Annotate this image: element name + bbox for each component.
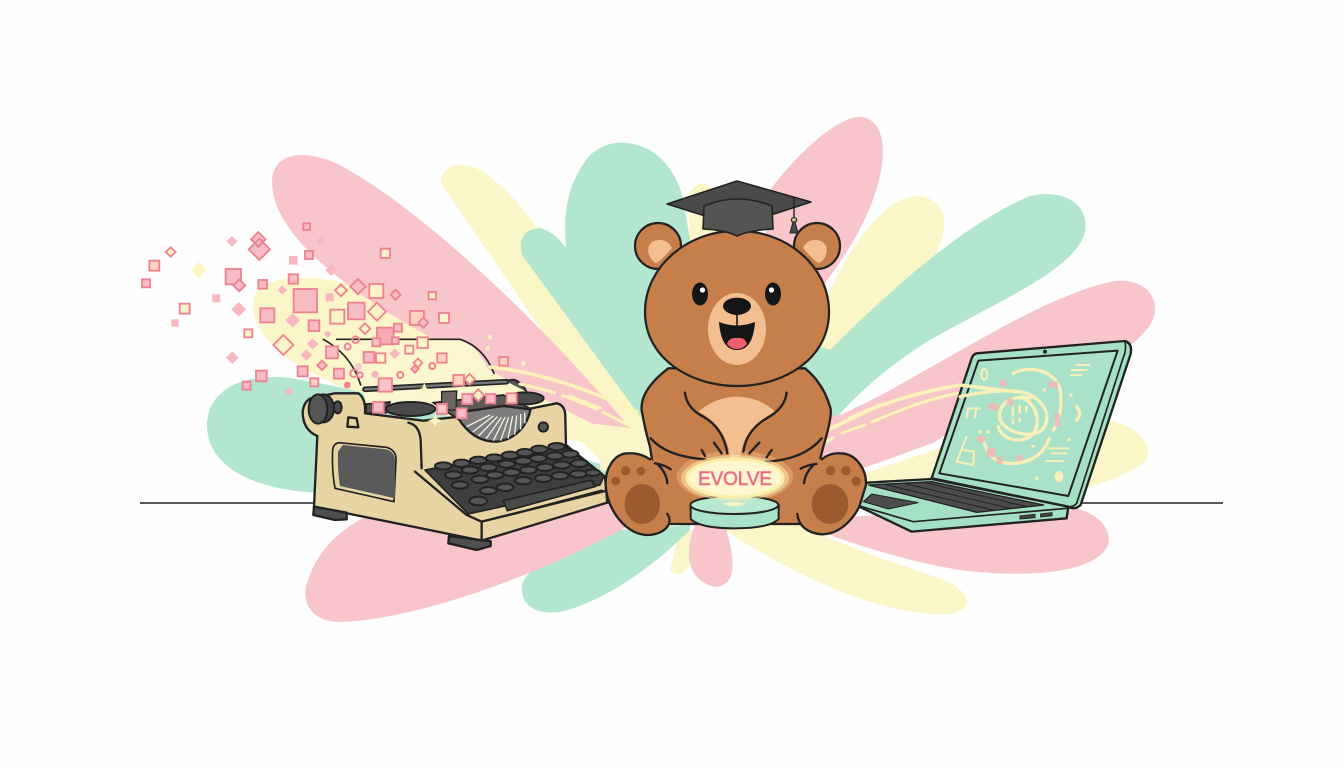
rollers and knob: [506, 392, 544, 404]
carriage bar: [365, 382, 507, 389]
evolve label: EVOLVE: [698, 469, 772, 490]
background petals: [207, 117, 1155, 622]
right foot: [797, 453, 866, 534]
dissolving pixel particles: [142, 223, 526, 427]
bear head: [645, 231, 829, 386]
front edge: [415, 472, 607, 541]
ports: [1020, 513, 1052, 519]
light stream on laptop: [960, 385, 1035, 398]
bear torso: [606, 368, 866, 535]
base disk: [690, 496, 779, 528]
evolve glow badge: [681, 455, 789, 501]
body details: [347, 417, 422, 468]
ground line: [140, 502, 1223, 504]
bear face: [692, 282, 781, 365]
paper sheet: [323, 339, 502, 405]
touchpad: [863, 494, 918, 509]
typewriter body: [303, 393, 607, 541]
left foot: [606, 453, 673, 535]
laptop base: [859, 479, 1068, 532]
type basket: [458, 406, 531, 442]
typewriter: [303, 339, 607, 550]
light streams toward laptop and bear: [490, 367, 960, 460]
keys: [435, 443, 600, 505]
sparkles: [417, 335, 526, 427]
laptop screen: [939, 351, 1118, 496]
feet: [313, 507, 347, 520]
carriage mechanism: [366, 402, 390, 413]
laptop: [859, 341, 1131, 532]
bear ears: [635, 223, 840, 269]
bear: [606, 181, 866, 535]
keyboard well: [425, 445, 604, 514]
graduation cap: [667, 181, 811, 236]
side window: [332, 443, 396, 502]
space bar: [503, 480, 595, 511]
screen swirl: [957, 365, 1089, 482]
keyboard: [868, 482, 1044, 512]
laptop lid: [932, 341, 1131, 508]
